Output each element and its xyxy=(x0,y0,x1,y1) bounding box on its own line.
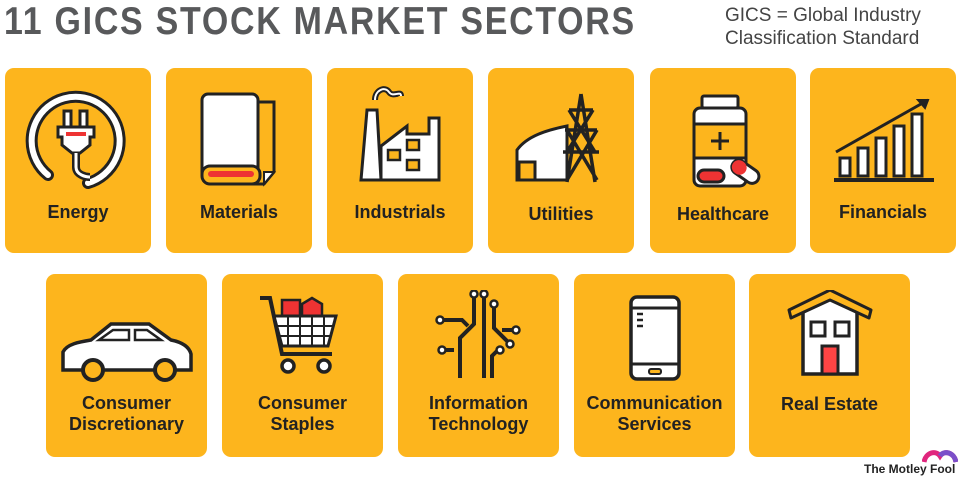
icon: house xyxy=(788,290,872,376)
tile: Utilities xyxy=(488,68,634,253)
subtitle: GICS definition xyxy=(725,5,921,49)
logo: The Motley Fool: The Motley Fool xyxy=(864,462,955,476)
tile: Consumer Staples xyxy=(222,274,383,457)
tile: Financials xyxy=(810,68,956,253)
label: Materials xyxy=(200,202,278,222)
label xyxy=(69,393,184,434)
label: Information xyxy=(429,393,528,413)
tile: Industrials xyxy=(327,68,473,253)
label: Discretionary xyxy=(69,414,184,434)
icon: car xyxy=(61,322,193,382)
tile: Information Technology xyxy=(398,274,559,457)
label: Utilities xyxy=(528,204,594,224)
label: Communication xyxy=(586,393,722,413)
label xyxy=(428,393,528,434)
icon: rising bar chart xyxy=(834,98,934,182)
icon: pylon xyxy=(516,94,599,182)
label xyxy=(258,393,347,434)
logo: The Motley Fool xyxy=(864,450,958,476)
tile: Real Estate xyxy=(749,274,910,457)
icon: jester hat xyxy=(922,450,958,462)
label: Energy xyxy=(47,202,109,222)
tile: Materials xyxy=(166,68,312,253)
label: Healthcare xyxy=(677,204,769,224)
title: 11 GICS STOCK MARKET SECTORS xyxy=(4,0,636,43)
icon: factory xyxy=(359,86,440,182)
label: Industrials xyxy=(354,202,446,222)
icon: circuit xyxy=(435,290,521,378)
label: Staples xyxy=(270,414,335,434)
label: Real Estate xyxy=(781,394,878,414)
subtitle: GICS definition: GICS = Global Industry xyxy=(725,5,921,26)
tile: Energy xyxy=(5,68,151,253)
subtitle: GICS definition: Classification Standard xyxy=(725,28,919,49)
icon: smartphone xyxy=(629,295,681,381)
label xyxy=(586,393,722,434)
label: Consumer xyxy=(258,393,347,413)
icon: medicine bottle xyxy=(692,94,760,188)
icon: shopping cart xyxy=(260,296,338,374)
label: Technology xyxy=(429,414,528,434)
icon: plug xyxy=(26,90,126,189)
icon: scroll xyxy=(200,92,276,187)
tile: Healthcare xyxy=(650,68,796,253)
tile: Communication Services xyxy=(574,274,735,457)
label: Financials xyxy=(839,202,927,222)
label: Consumer xyxy=(82,393,171,413)
tile: Consumer Discretionary xyxy=(46,274,207,457)
label: Services xyxy=(617,414,692,434)
